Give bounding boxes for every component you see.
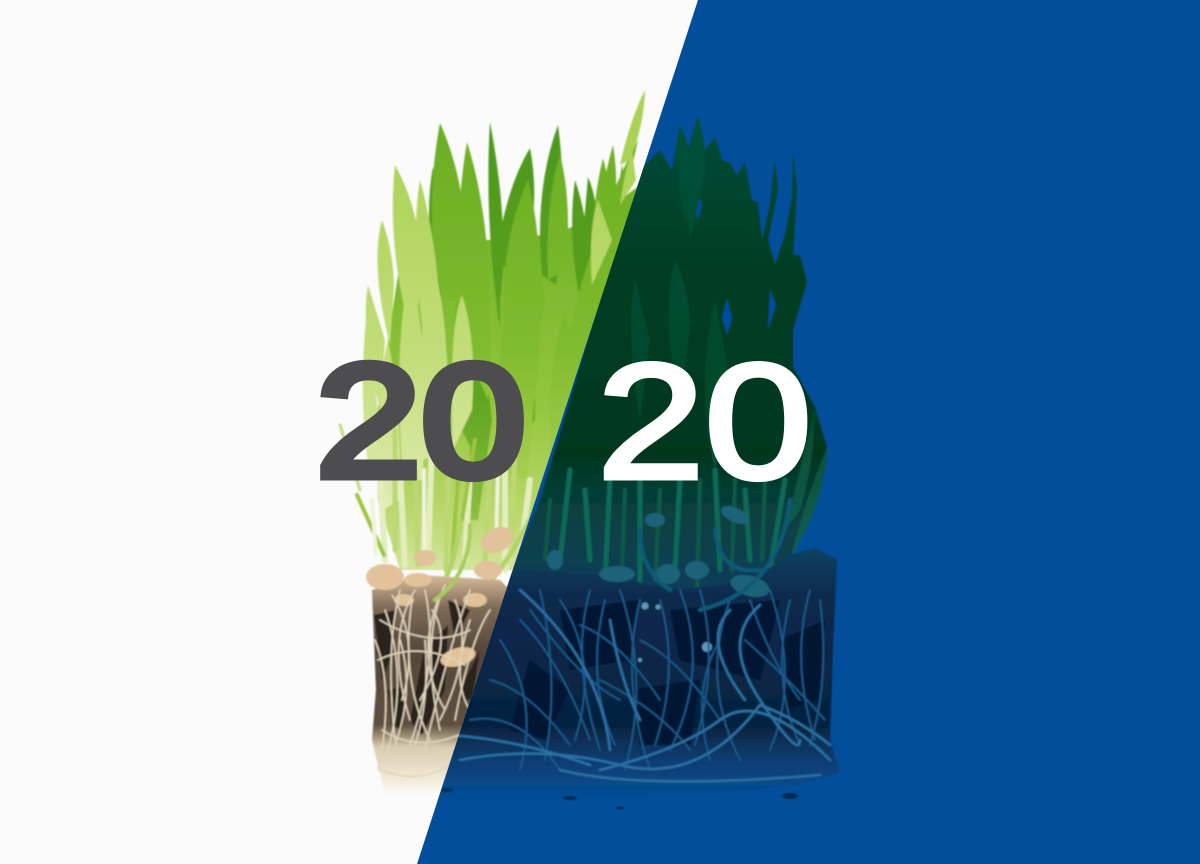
plant: natural colour wheatgrass, left half (340, 90, 660, 795)
dark grass mass (500, 115, 827, 600)
seeds (547, 502, 772, 601)
split infographic canvas (320, 0, 1200, 864)
number: white 20 on the blue side: 20 (597, 330, 812, 513)
plant: blue-tinted wheatgrass, right half (430, 115, 840, 810)
light leaves (363, 90, 645, 510)
stems in teal (545, 470, 785, 590)
dark leaves (631, 115, 827, 560)
mid leaves (432, 123, 638, 510)
number: dark 20 on the light side: 20 (316, 331, 526, 510)
soil crumbs below (441, 788, 798, 810)
near-black soil patches (510, 600, 825, 745)
background: blue diagonal panel (417, 0, 1200, 864)
roots (375, 585, 490, 776)
blue gaps between the leaves (694, 190, 776, 335)
white soil specks (638, 602, 712, 662)
stems (338, 422, 534, 581)
grass mass (376, 186, 638, 571)
dark soil patches (374, 600, 480, 735)
back leaves (429, 122, 612, 520)
seeds (366, 522, 517, 670)
soil block (430, 548, 840, 800)
soil block (372, 575, 520, 795)
roots (470, 590, 825, 770)
